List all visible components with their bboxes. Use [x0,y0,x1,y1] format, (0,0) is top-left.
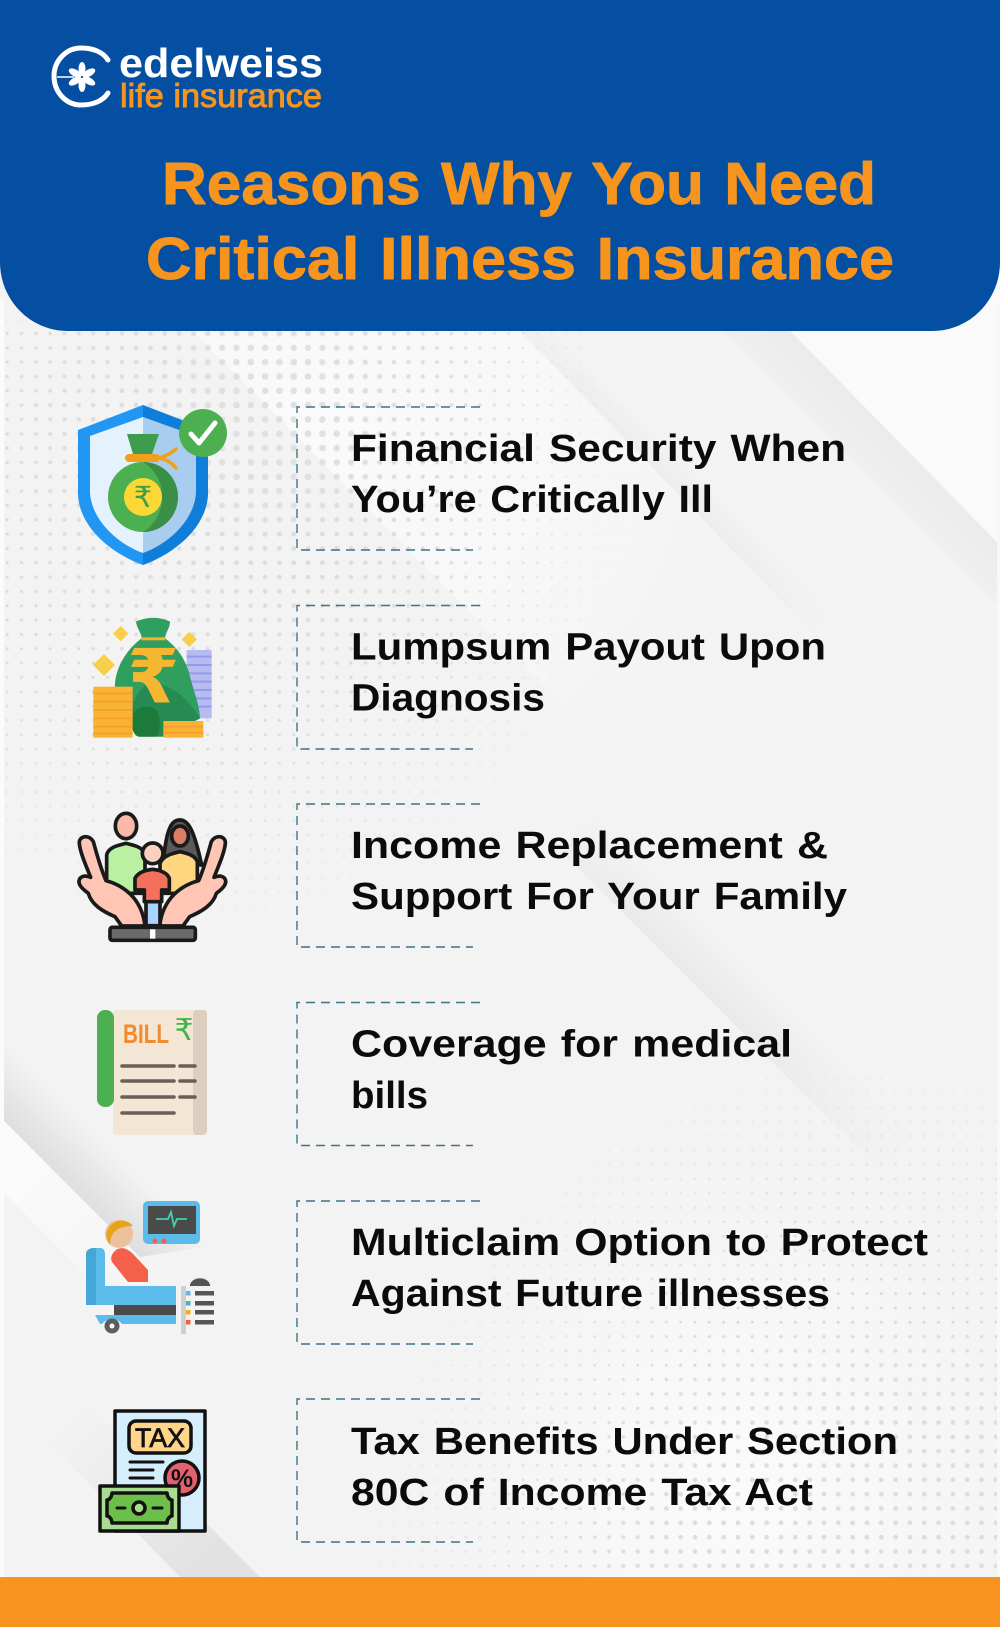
icon part: child [135,843,169,926]
icon part: right hand [160,837,226,926]
text: bills [351,1075,428,1117]
icon: tax document and banknote: TAX [135,1423,185,1453]
dashed frame [297,1399,480,1542]
text: Financial Security When [351,428,846,470]
icon: rupee money bag and coins: ₹ [127,634,179,718]
dashed frame [297,804,480,947]
icon: bill [97,1010,207,1135]
dashed frame [297,1002,480,1146]
title: Reasons Why You Need [162,151,876,217]
row 5: multiclaim [86,1201,928,1344]
text: Coverage for medical [351,1024,792,1066]
icon: family held in hands [79,813,226,940]
text: Diagnosis [351,678,545,720]
icon: patient in hospital bed with monitor [86,1201,214,1334]
row 6: tax benefits [100,1399,898,1542]
text [351,626,826,720]
text [351,1024,792,1117]
text: Multiclaim Option to Protect [351,1222,928,1264]
text: Income Replacement & [351,825,828,867]
icon part: left hand [79,837,145,926]
text [351,1222,928,1315]
icon: bill: BILL [123,1019,169,1049]
dashed frame [297,407,480,550]
icon: logo mark [54,48,108,105]
row 2: lumpsum payout [93,606,826,749]
text: You’re Critically Ill [351,479,713,521]
row 3: income replacement [79,804,847,947]
logo tagline: life insurance [120,77,322,114]
row 4: medical bills [97,1002,792,1146]
text [351,428,846,521]
icon part: woman [160,820,202,893]
title: Critical Illness Insurance [146,226,894,292]
logo: edelweiss life insurance [54,40,323,114]
text: 80C of Income Tax Act [351,1472,813,1514]
icon: rupee money bag and coins [93,618,212,738]
icon: tax document and banknote [100,1411,205,1531]
text: Against Future illnesses [351,1273,830,1315]
dashed frame [297,1201,480,1344]
text [351,825,847,918]
row 1: financial security [78,405,846,565]
title [146,151,894,292]
text: Tax Benefits Under Section [351,1421,898,1463]
icon: tax document and banknote: % [171,1465,193,1493]
text: Lumpsum Payout Upon [351,626,826,668]
footer bar [0,1577,1000,1627]
logo wordmark: edelweiss [119,40,323,86]
dashed frame [297,606,480,749]
icon: shield with money bag [78,405,227,565]
icon part: man [107,813,145,893]
text: Support For Your Family [351,876,847,918]
text [351,1421,898,1514]
icon: bill: ₹ [174,1014,194,1047]
header panel [0,0,1000,331]
icon: shield with money bag: ₹ [134,482,152,514]
